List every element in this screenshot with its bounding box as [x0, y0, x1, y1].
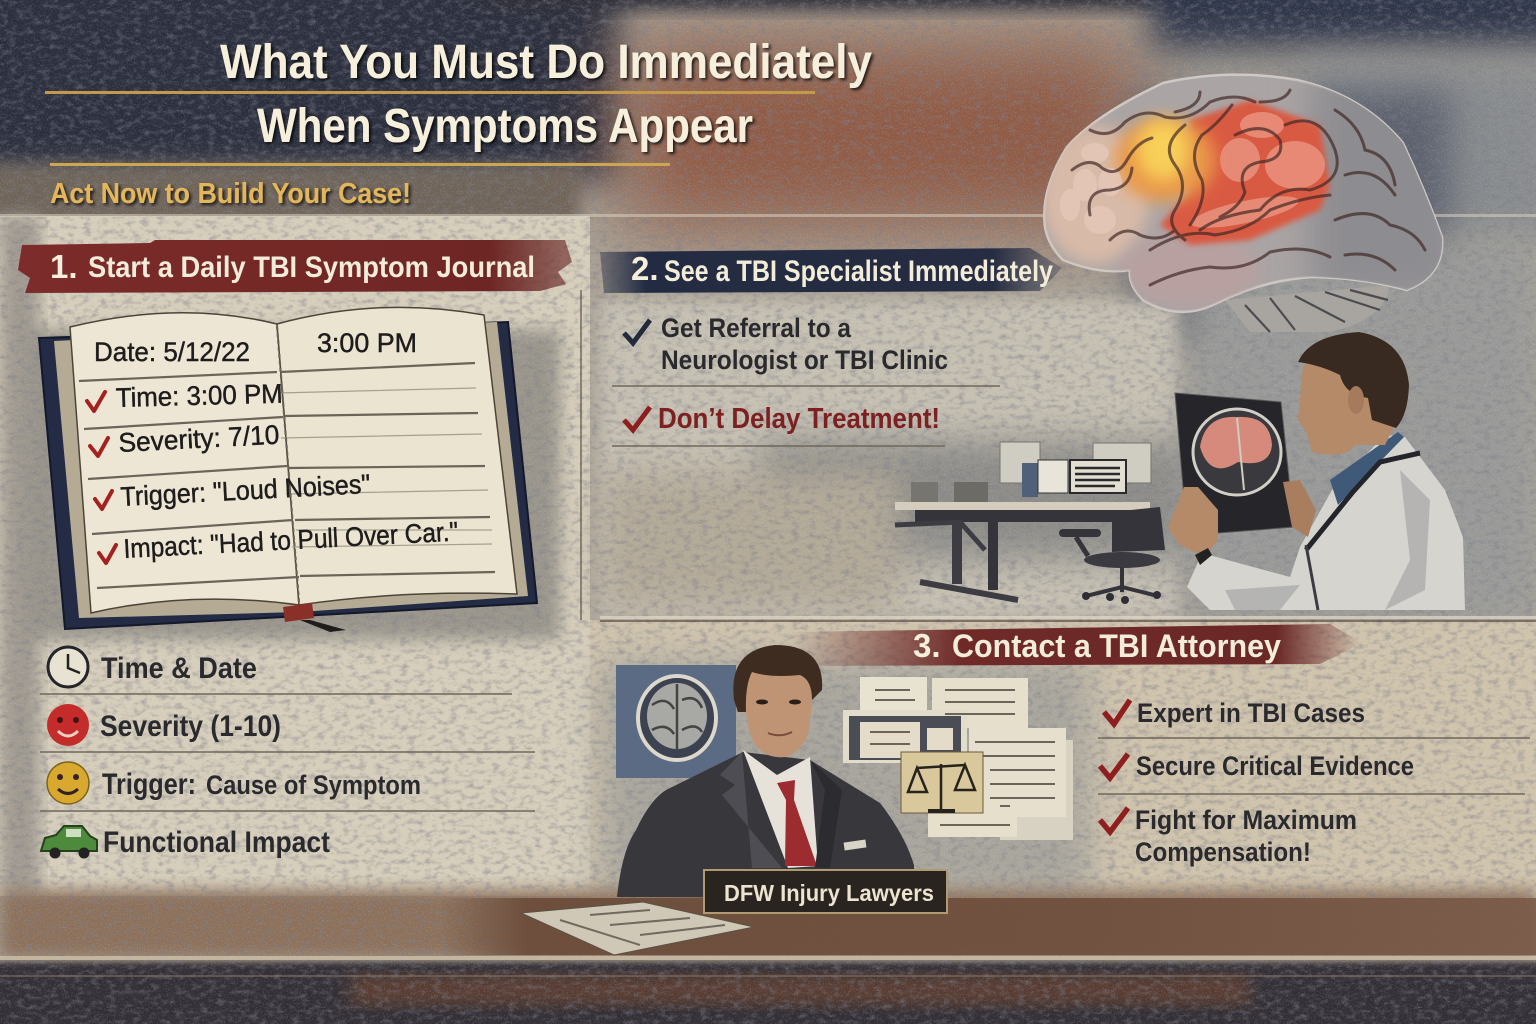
nameplate: DFW Injury Lawyers [724, 880, 934, 906]
notebook: 3:00 PM [317, 328, 417, 358]
step 1 heading: Start a Daily TBI Symptom Journal [88, 251, 535, 284]
panel: step 2 specialist [600, 248, 1465, 610]
notebook: Trigger: "Loud Noises" [120, 469, 371, 512]
step 2 heading: See a TBI Specialist Immediately [664, 255, 1053, 288]
office scene [895, 442, 1165, 604]
checklist: referral [612, 313, 1000, 446]
step 2 heading [600, 248, 1062, 293]
step 3 heading [790, 624, 1362, 666]
notebook: Date: 5/12/22 [94, 337, 250, 367]
attorney portrait [617, 645, 914, 898]
checklist: attorney benefits: Compensation! [1135, 837, 1311, 867]
icon: yellow face [47, 762, 89, 804]
title: What You Must Do Immediately [220, 36, 872, 89]
desk surface [440, 898, 1536, 955]
checklist: journal fields: Trigger: [102, 768, 196, 801]
notebook [39, 307, 537, 632]
checklist: journal fields: Functional Impact [103, 826, 330, 859]
checklist: attorney benefits [1098, 698, 1530, 867]
step 2 heading: 2. [631, 250, 659, 287]
checklist: journal fields [40, 647, 535, 859]
step 3 heading: Contact a TBI Attorney [952, 628, 1281, 664]
papers on desk [521, 902, 754, 955]
checklist: attorney benefits: Secure Critical Evidence [1136, 751, 1414, 781]
documents and scales [843, 677, 1073, 840]
checklist: referral: Neurologist or TBI Clinic [661, 345, 948, 375]
step 1 heading [18, 240, 572, 293]
doctor with scan [1168, 332, 1465, 610]
icon: car [41, 826, 97, 858]
checklist: journal fields: Severity (1-10) [100, 710, 281, 743]
title [220, 36, 872, 153]
subtitle: Act Now to Build Your Case! [50, 178, 411, 210]
checklist: journal fields: Cause of Symptom [206, 770, 421, 800]
step 3 heading: 3. [913, 627, 941, 664]
panel: step 3 attorney [440, 624, 1536, 955]
nameplate [704, 870, 947, 913]
checklist: journal fields: Time & Date [101, 652, 257, 685]
title: When Symptoms Appear [257, 100, 753, 153]
panel: step 1 journal [18, 240, 572, 859]
checklist: attorney benefits: Fight for Maximum [1135, 805, 1357, 835]
icon: clock [48, 647, 88, 687]
checklist: referral: Get Referral to a [661, 313, 852, 343]
brain scan tile [616, 665, 736, 778]
notebook: Time: 3:00 PM [115, 379, 283, 413]
checklist: attorney benefits: Expert in TBI Cases [1137, 698, 1365, 728]
notebook: Impact: "Had to Pull Over Car." [123, 517, 459, 564]
notebook: Severity: 7/10 [118, 420, 280, 458]
icon: brain illustration [1040, 70, 1460, 332]
title rules [45, 91, 815, 166]
checklist: referral: Don’t Delay Treatment! [658, 403, 940, 435]
icon: red face [47, 704, 89, 746]
step 1 heading: 1. [50, 248, 78, 285]
